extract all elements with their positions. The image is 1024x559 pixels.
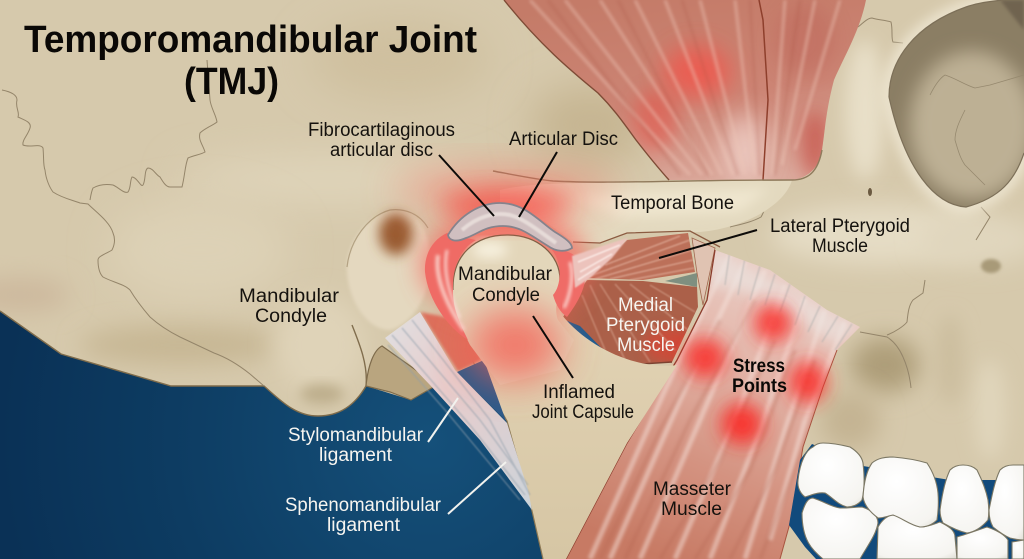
- title: [24, 19, 477, 103]
- articular disc: [448, 203, 572, 251]
- label: medial pterygoid muscle: [606, 295, 685, 356]
- title: Temporomandibular Joint: [24, 19, 477, 61]
- leader lines: [439, 152, 757, 378]
- label: inflamed joint capsule: Joint Capsule: [532, 402, 634, 423]
- lower molar 2: [877, 515, 957, 559]
- label: mandibular condyle (skull): [239, 286, 340, 327]
- tendon wedge: [692, 238, 715, 305]
- teeth: [798, 443, 1024, 559]
- label: inflamed joint capsule: [532, 382, 634, 423]
- label: inflamed joint capsule: Inflamed: [543, 382, 615, 403]
- label: stylomandibular ligament: [288, 425, 424, 466]
- upper premolar: [940, 465, 989, 533]
- styloid bump: [366, 346, 437, 400]
- upper molar 1: [798, 443, 864, 507]
- label: sphenomandibular ligament: [285, 495, 442, 536]
- mandible ramus: [455, 290, 677, 559]
- label: fibrocartilaginous articular disc: [308, 120, 455, 161]
- gap between pterygoids: [665, 273, 697, 287]
- label: stress points: Points: [732, 376, 787, 397]
- temporalis muscle: [500, 0, 870, 185]
- temporal bone strip: [493, 150, 822, 247]
- label: masseter muscle: [653, 479, 732, 520]
- label: stylomandibular ligament: ligament: [319, 445, 393, 466]
- label: mandibular condyle (joint): [458, 264, 553, 306]
- label: fibrocartilaginous articular disc: Fibrocartilaginous: [308, 120, 455, 141]
- masseter muscle: [560, 245, 865, 559]
- stress point glows: [684, 304, 827, 445]
- label: masseter muscle: Masseter: [653, 479, 732, 500]
- label: temporal bone: Temporal Bone: [611, 193, 734, 214]
- label: lateral pterygoid muscle: Lateral Pterygoid: [770, 216, 910, 237]
- condyle: [453, 235, 574, 385]
- upper molar 2: [863, 457, 938, 527]
- ligaments: [385, 312, 532, 510]
- label: stress points: Stress: [733, 356, 785, 377]
- white leader lines: [428, 398, 506, 514]
- label: mandibular condyle (skull): Condyle: [255, 306, 327, 327]
- background: navy backdrop: [0, 311, 543, 559]
- mastoid process: [300, 325, 366, 404]
- joint capsule: left lobe: [425, 233, 476, 340]
- pterygoid tendon: [572, 238, 628, 288]
- lower molar 1: [802, 498, 878, 559]
- label: stress points: [732, 356, 787, 397]
- small navy window: [457, 360, 506, 421]
- lower canine: [1012, 540, 1024, 559]
- skull sutures: [2, 18, 990, 388]
- joint capsule: right lobe: [552, 250, 585, 317]
- eye orbit: [880, 0, 1024, 215]
- label: lateral pterygoid muscle: [770, 216, 910, 257]
- inflammation glow: [395, 172, 615, 221]
- soft tissue behind capsule: [420, 312, 482, 372]
- medial pterygoid muscle: [563, 280, 698, 364]
- label: mandibular condyle (joint): Condyle: [472, 285, 540, 306]
- navy gap behind teeth: [789, 444, 1024, 559]
- label: stylomandibular ligament: Stylomandibular: [288, 425, 424, 446]
- title: (TMJ): [184, 61, 279, 103]
- label: fibrocartilaginous articular disc: articular disc: [330, 140, 433, 161]
- label: sphenomandibular ligament: ligament: [327, 515, 401, 536]
- zygoma foramina: [868, 188, 1001, 273]
- ear canal: [347, 210, 430, 330]
- label: sphenomandibular ligament: Sphenomandibular: [285, 495, 442, 516]
- label: lateral pterygoid muscle: Muscle: [812, 236, 868, 257]
- lower premolar: [957, 527, 1008, 559]
- label: articular disc: Articular Disc: [509, 129, 618, 150]
- label: mandibular condyle (skull): Mandibular: [239, 286, 340, 307]
- label: medial pterygoid muscle: Medial: [618, 295, 673, 316]
- label: medial pterygoid muscle: Pterygoid: [606, 315, 685, 336]
- lateral pterygoid muscle: [589, 233, 695, 280]
- red glow around joint: [420, 210, 590, 320]
- label: masseter muscle: Muscle: [661, 499, 722, 520]
- upper canine: [989, 465, 1024, 540]
- label: medial pterygoid muscle: Muscle: [617, 335, 675, 356]
- label: mandibular condyle (joint): Mandibular: [458, 264, 553, 285]
